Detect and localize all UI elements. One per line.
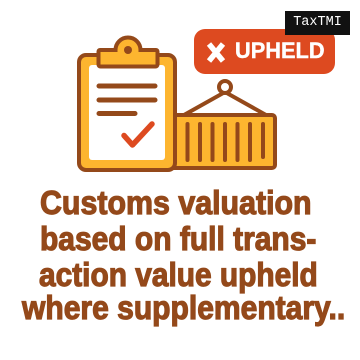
badge label: UPHELD [235,38,325,63]
title line 3: action value upheld [39,256,318,293]
icon: cross mark [206,42,226,63]
title line 2: based on full trans- [40,220,316,257]
watermark: TaxTMI: TaxTMI [293,15,342,30]
title text [21,184,345,327]
icon: clipboard [79,38,175,170]
badge: upheld [194,29,335,74]
title line 4: where supplementary.. [22,289,345,326]
icon: shipping container [170,81,275,168]
watermark: TaxTMI [285,11,350,35]
title line 1: Customs valuation [40,184,312,221]
